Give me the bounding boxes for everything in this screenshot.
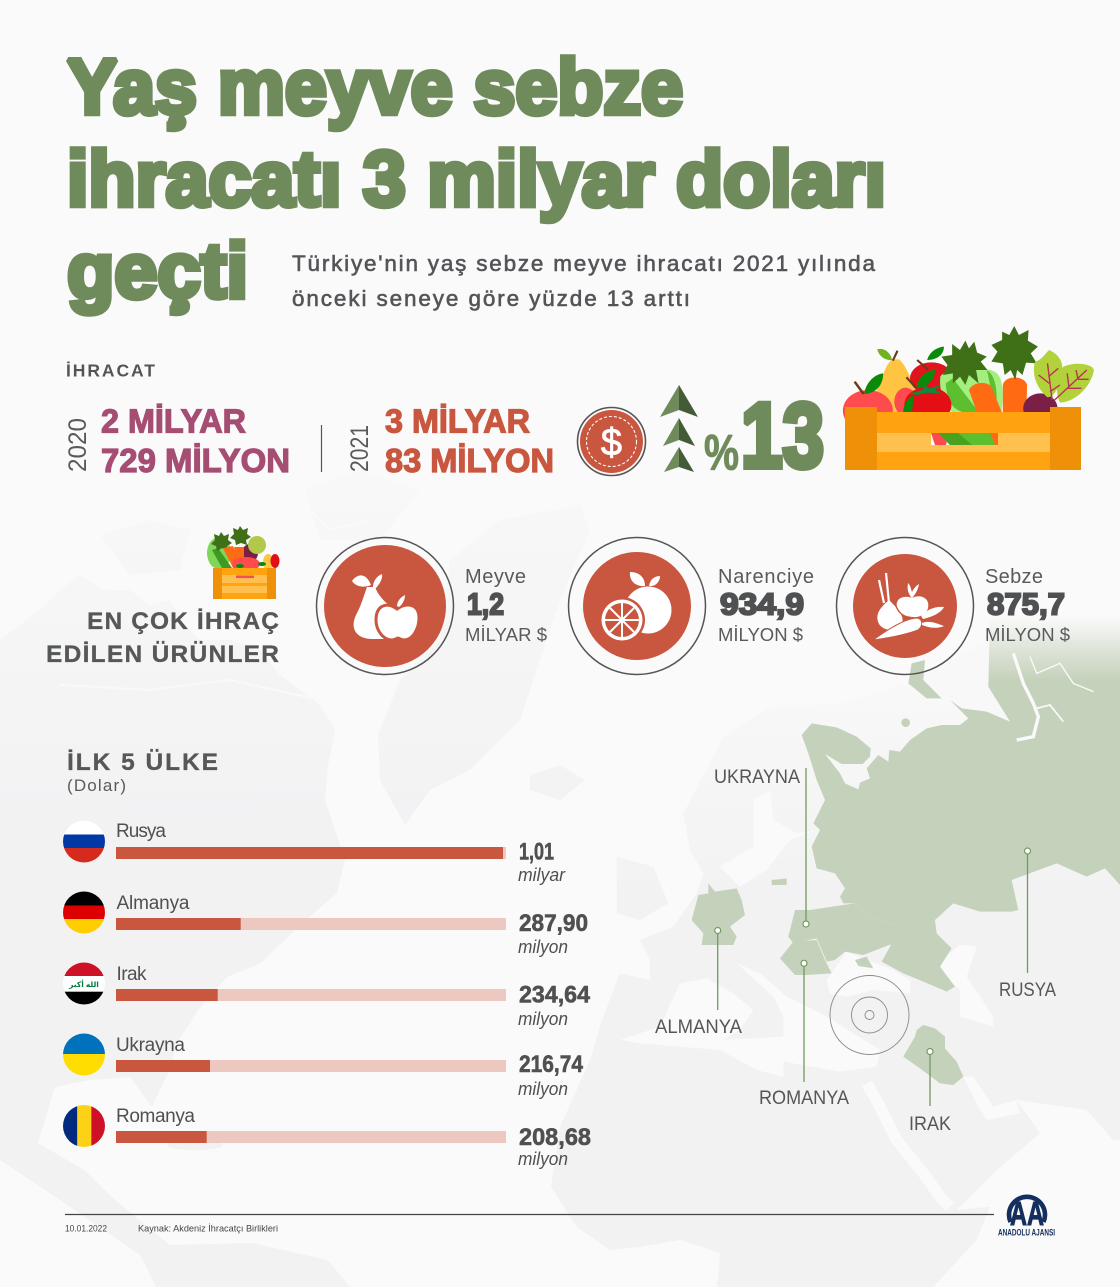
row: Irak: 234,64: [519, 982, 590, 1008]
subtitle: Türkiye'nin yaş sebze meyve ihracatı 2021 yılında: [292, 251, 875, 276]
row: Irak: milyon: [518, 1009, 568, 1029]
flag: Ukraine: [63, 1033, 105, 1076]
panel: most exported products: [46, 526, 1070, 674]
heading: most exported products: EDİLEN ÜRÜNLER: [46, 641, 279, 668]
row: Romanya: [63, 1105, 591, 1169]
percent increase: %: [704, 424, 739, 480]
carrots: [969, 383, 1003, 415]
label: Meyve: [465, 566, 526, 588]
marker: Irak: [909, 1048, 951, 1135]
apple left: [843, 390, 893, 431]
percent increase: 13: [741, 385, 824, 487]
value: 934,9: [720, 586, 804, 622]
row: Romanya: Romanya: [116, 1106, 195, 1127]
value 2020: 2 MİLYAR: [101, 402, 246, 440]
row: Ukrayna: [63, 1033, 583, 1099]
icon: growth arrows: [660, 385, 698, 472]
map: country markers and labels: [655, 767, 1056, 1135]
icon: vegetables: [836, 538, 974, 674]
tomato: [904, 387, 951, 423]
carrot tops: [941, 326, 1038, 385]
row: Rusya: [63, 820, 566, 885]
subtitle: [292, 251, 875, 311]
title: geçti: [67, 226, 248, 314]
row: Irak: [63, 962, 590, 1029]
product: Narenciye: [568, 538, 814, 674]
map: Crimea: [855, 957, 873, 968]
map: Germany: [692, 883, 745, 945]
marker: Rusya: [999, 848, 1056, 1001]
marker: Ukrayna: [714, 767, 809, 927]
row: Irak: Irak: [116, 964, 147, 985]
year label 2021: 2021: [346, 425, 374, 472]
icon: pear and apple: [316, 538, 454, 674]
heading: most exported products: EN ÇOK İHRAÇ: [87, 608, 279, 635]
marker: Irak: IRAK: [909, 1114, 951, 1135]
row: Ukrayna: Ukrayna: [116, 1035, 185, 1056]
row: Ukrayna: 216,74: [519, 1051, 583, 1078]
heading: top 5 countries: İLK 5 ÜLKE: [67, 749, 218, 776]
unit: MİLYAR $: [465, 624, 547, 645]
marker: Ukrayna: UKRAYNA: [714, 767, 800, 788]
logo: Anadolu Ajansı: [998, 1195, 1055, 1238]
panel: export figures: [64, 360, 554, 479]
unit note: (Dolar): [67, 776, 126, 795]
icon: dollar coin: [578, 408, 646, 476]
apple back: [910, 362, 953, 394]
product: Sebze: [836, 538, 1070, 674]
marker: Romanya: ROMANYA: [759, 1088, 849, 1109]
map: Ukraine: [788, 903, 895, 962]
value 2021: 83 MİLYON: [385, 442, 554, 479]
title: ihracatı 3 milyar doları: [67, 134, 886, 222]
icon: citrus: [568, 538, 706, 674]
heading: İHRACAT: İHRACAT: [66, 360, 155, 380]
row: Romanya: milyon: [518, 1149, 568, 1169]
year label 2020: 2020: [64, 418, 92, 472]
icon: dollar coin: $: [601, 422, 622, 464]
lettuce: [940, 368, 1003, 417]
row: Rusya: 1,01: [519, 838, 554, 866]
percent increase: [704, 385, 824, 487]
row: Romanya: 208,68: [519, 1124, 591, 1151]
marker: Romanya: [759, 960, 849, 1109]
row: Rusya: Rusya: [116, 821, 166, 842]
icon: large vegetable crate: [843, 326, 1094, 470]
map: Turkey location target rings: [830, 976, 909, 1054]
label: Sebze: [985, 566, 1043, 588]
flag: Romania: [63, 1105, 105, 1147]
flag: Russia: [63, 820, 105, 863]
panel: top 5 countries: [63, 749, 591, 1169]
heading: most exported products: [46, 608, 279, 668]
icon: small vegetable crate: [207, 526, 280, 599]
logo: Anadolu Ajansı: AA: [1010, 1195, 1044, 1232]
value 2021: 3 MİLYAR: [385, 402, 530, 440]
value 2021: [385, 402, 554, 479]
value 2020: [101, 402, 290, 479]
source: Kaynak: Akdeniz İhracatçı Birlikleri: [138, 1224, 278, 1234]
marker: Almanya: ALMANYA: [655, 1017, 742, 1038]
product: Meyve: [316, 538, 547, 674]
crate body: [877, 412, 1050, 470]
beet: [1023, 393, 1057, 423]
date: 10.01.2022: [65, 1224, 107, 1234]
value: 1,2: [467, 586, 504, 622]
value 2020: 729 MİLYON: [101, 442, 290, 479]
row: Almanya: 287,90: [519, 910, 588, 937]
title: Yaş meyve sebze: [67, 42, 683, 130]
background world map: [0, 470, 1120, 1287]
map: Iraq: [903, 1025, 963, 1085]
value: 875,7: [987, 586, 1065, 622]
subtitle: önceki seneye göre yüzde 13 arttı: [292, 286, 690, 311]
unit: MİLYON $: [718, 624, 803, 645]
flag: Germany: [63, 891, 105, 934]
title: [67, 42, 886, 314]
map: Russia: [772, 617, 1120, 992]
divider: [320, 425, 322, 472]
marker: Almanya: [655, 928, 742, 1038]
footer: [65, 1195, 1055, 1238]
row: Almanya: milyon: [518, 937, 568, 957]
map: Romania: [780, 940, 832, 975]
unit: MİLYON $: [985, 624, 1070, 645]
flag: Iraq: [63, 962, 105, 1005]
pear: [876, 359, 917, 417]
label: Narenciye: [718, 566, 814, 588]
row: Ukrayna: milyon: [518, 1079, 568, 1099]
row: Almanya: Almanya: [116, 893, 190, 914]
map: highlighted countries: [692, 617, 1120, 1085]
row: Rusya: milyar: [518, 865, 566, 885]
flag: Iraq: الله أكبر: [68, 979, 99, 989]
marker: Rusya: RUSYA: [999, 980, 1056, 1001]
row: Almanya: [63, 891, 588, 957]
logo: Anadolu Ajansı: ANADOLU AJANSI: [998, 1228, 1055, 1238]
